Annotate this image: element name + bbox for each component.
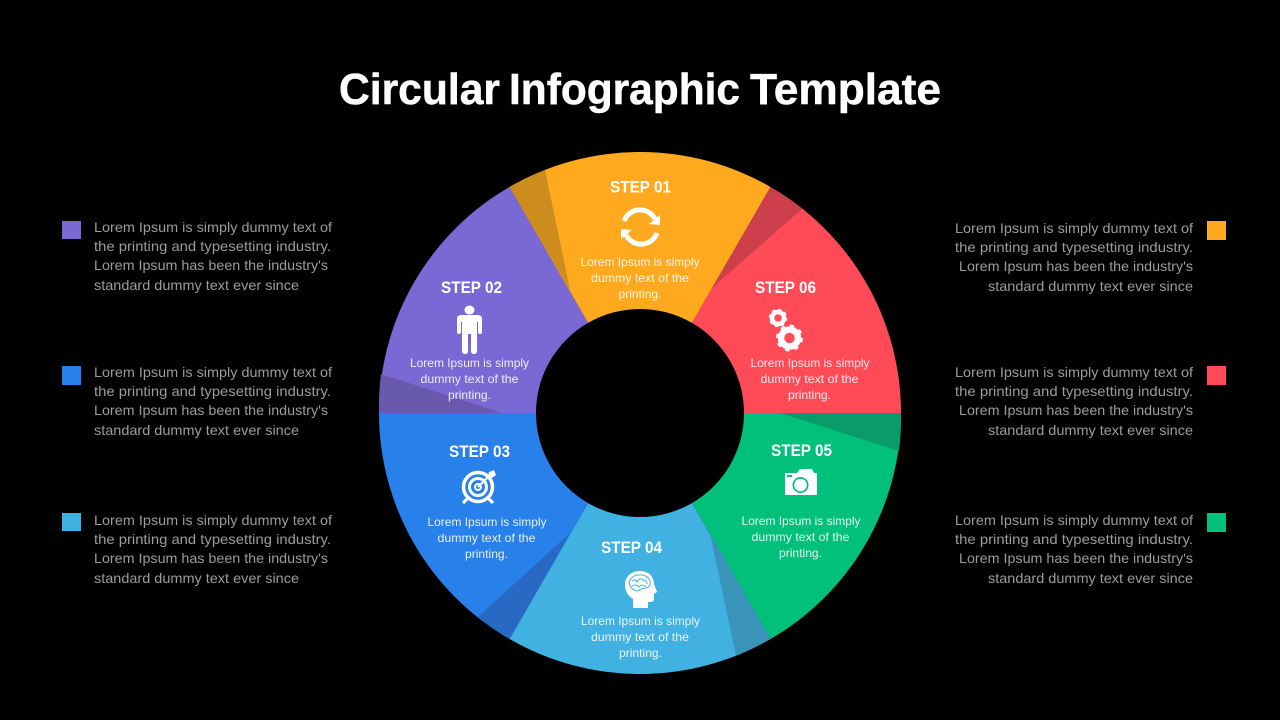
panel: right legend step 06 bbox=[955, 364, 1226, 438]
legend text: blue: the printing and typesetting industry. bbox=[94, 383, 331, 399]
legend text: green bbox=[955, 512, 1193, 586]
legend text: purple: Lorem Ipsum is simply dummy text of bbox=[94, 219, 332, 235]
legend text: red: Lorem Ipsum has been the industry's bbox=[959, 402, 1193, 418]
legend text: orange: Lorem Ipsum is simply dummy text of bbox=[955, 220, 1193, 236]
segment: step 04 light blue bbox=[510, 503, 770, 674]
title: Infographic bbox=[509, 65, 740, 114]
legend text: green: standard dummy text ever since bbox=[988, 570, 1193, 586]
legend swatch: green bbox=[1207, 513, 1226, 532]
segment: step 02 purple: printing. bbox=[448, 388, 491, 402]
segment: step 01 orange bbox=[510, 152, 770, 323]
segment: step 04 light blue: STEP 04 bbox=[601, 538, 662, 557]
title: Circular bbox=[339, 65, 500, 114]
segment: step 02 purple: dummy text of the bbox=[420, 372, 519, 386]
legend text: blue bbox=[94, 364, 332, 438]
segment: step 05 green: dummy text of the bbox=[752, 530, 850, 544]
panel: right legend step 05 bbox=[955, 512, 1226, 586]
legend text: light blue bbox=[94, 512, 332, 586]
segment: step 01 orange: Lorem Ipsum is simply bbox=[580, 255, 700, 269]
segment: step 02 purple: STEP 02 bbox=[441, 278, 502, 297]
legend text: blue: Lorem Ipsum has been the industry's bbox=[94, 402, 328, 418]
segment: step 05 green: Lorem Ipsum is simply bbox=[742, 514, 860, 528]
segment: step 03 blue: STEP 03 bbox=[449, 442, 510, 461]
legend text: red: the printing and typesetting industry. bbox=[955, 383, 1193, 399]
legend text: green: Lorem Ipsum is simply dummy text of bbox=[955, 512, 1193, 528]
legend text: red bbox=[955, 364, 1193, 438]
legend swatch: orange bbox=[1207, 221, 1226, 240]
segment: step 05 green bbox=[692, 413, 901, 639]
legend text: green: the printing and typesetting industry. bbox=[955, 531, 1193, 547]
legend text: blue: standard dummy text ever since bbox=[94, 422, 299, 438]
segment: step 03 blue: dummy text of the bbox=[438, 531, 536, 545]
legend text: orange: Lorem Ipsum has been the industry's bbox=[959, 258, 1193, 274]
title: Template bbox=[750, 65, 941, 114]
segment: step 03 blue bbox=[379, 413, 588, 639]
legend swatch: light blue bbox=[62, 513, 81, 531]
segment: step 06 red: dummy text of the bbox=[760, 372, 859, 386]
legend text: purple: the printing and typesetting industry. bbox=[94, 238, 331, 254]
segment: step 04 light blue: Lorem Ipsum is simply bbox=[581, 614, 700, 628]
legend text: orange bbox=[955, 220, 1193, 294]
panel: donut chart bbox=[379, 152, 901, 674]
panel: left legend step 02 bbox=[62, 219, 332, 293]
title bbox=[339, 65, 941, 114]
panel: left legend step 03 bbox=[62, 364, 332, 438]
segment: step 04 light blue: printing. bbox=[619, 646, 662, 660]
icon: gears bbox=[770, 310, 802, 350]
icon: refresh arrows bbox=[621, 210, 660, 244]
panel: left legend step 04 bbox=[62, 512, 332, 586]
legend text: purple: Lorem Ipsum has been the industry's bbox=[94, 257, 328, 273]
legend text: orange: standard dummy text ever since bbox=[988, 278, 1193, 294]
segment: step 01 orange: STEP 01 bbox=[610, 178, 671, 196]
segment: step 06 red bbox=[692, 187, 901, 413]
icon: camera bbox=[785, 469, 817, 495]
legend swatch: purple bbox=[62, 221, 81, 239]
segment: step 03 blue: printing. bbox=[465, 547, 508, 561]
legend text: orange: the printing and typesetting industry. bbox=[955, 239, 1193, 255]
segment: step 02 purple: Lorem Ipsum is simply bbox=[410, 356, 529, 370]
segment: step 03 blue: Lorem Ipsum is simply bbox=[428, 515, 546, 529]
icon: head with brain bbox=[625, 571, 657, 608]
segment: step 01 orange: printing. bbox=[618, 287, 662, 301]
legend text: light blue: standard dummy text ever since bbox=[94, 570, 299, 586]
panel: right legend step 01 bbox=[955, 220, 1226, 294]
legend text: purple: standard dummy text ever since bbox=[94, 277, 299, 293]
segment: step 02 purple bbox=[379, 187, 588, 413]
segment: step 06 red: printing. bbox=[788, 388, 831, 402]
legend swatch: red bbox=[1207, 366, 1226, 385]
icon: person bbox=[457, 306, 482, 354]
segment: step 05 green: printing. bbox=[779, 546, 822, 560]
segment: step 04 light blue: dummy text of the bbox=[591, 630, 689, 644]
icon: target with dart bbox=[463, 470, 496, 503]
segment: step 05 green: STEP 05 bbox=[771, 441, 832, 460]
legend text: light blue: Lorem Ipsum is simply dummy text of bbox=[94, 512, 332, 528]
legend text: blue: Lorem Ipsum is simply dummy text of bbox=[94, 364, 332, 380]
legend swatch: blue bbox=[62, 366, 81, 385]
legend text: red: standard dummy text ever since bbox=[988, 422, 1193, 438]
legend text: light blue: Lorem Ipsum has been the industry's bbox=[94, 550, 328, 566]
legend text: red: Lorem Ipsum is simply dummy text of bbox=[955, 364, 1193, 380]
segment: step 06 red: Lorem Ipsum is simply bbox=[750, 356, 870, 370]
legend text: green: Lorem Ipsum has been the industry's bbox=[959, 550, 1193, 566]
segment: step 01 orange: dummy text of the bbox=[591, 271, 689, 285]
legend text: purple bbox=[94, 219, 332, 293]
legend text: light blue: the printing and typesetting industry. bbox=[94, 531, 331, 547]
segment: step 06 red: STEP 06 bbox=[755, 278, 816, 297]
